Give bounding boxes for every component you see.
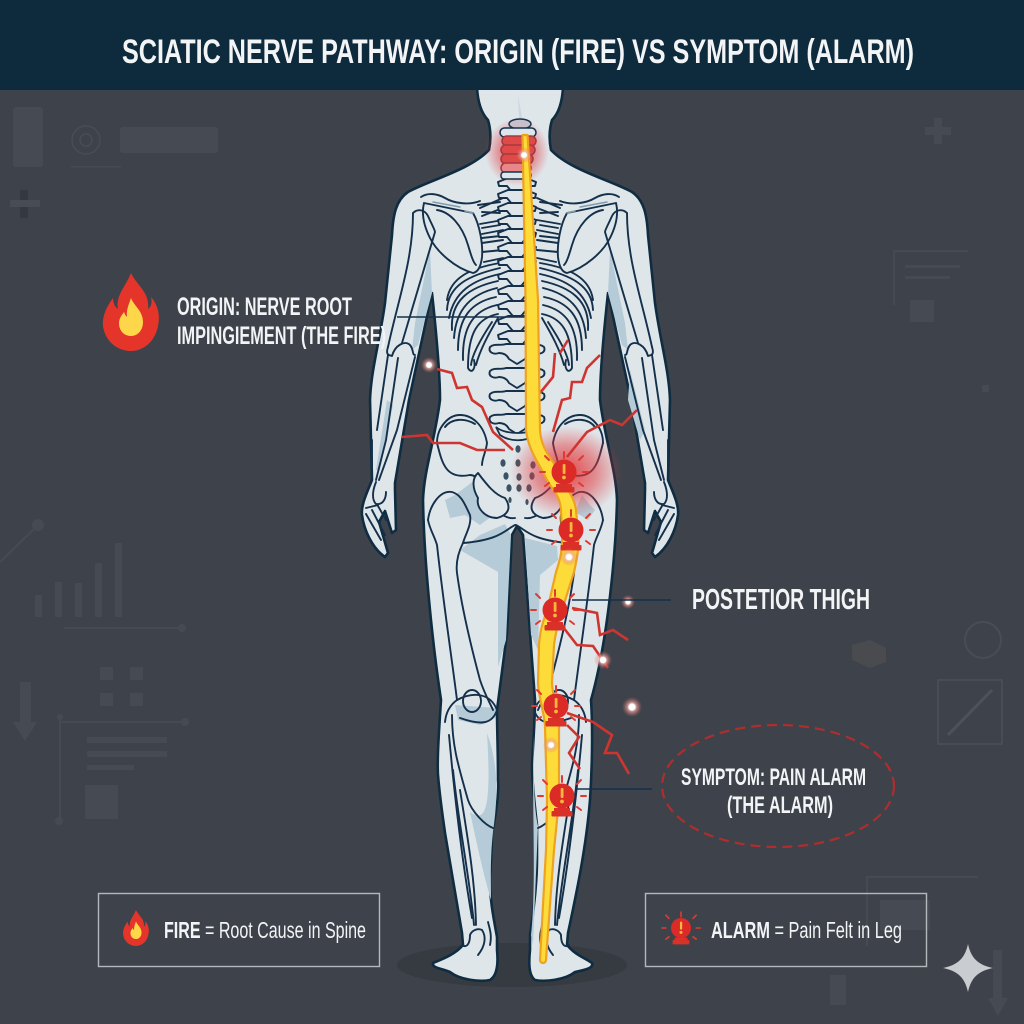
legend: fire bbox=[98, 894, 380, 966]
alarm markers along the nerve bbox=[531, 452, 595, 816]
hip pain glow bbox=[510, 426, 622, 518]
callout: symptom alarm bbox=[662, 725, 894, 847]
blue muscle shading bbox=[376, 95, 645, 945]
icon: fire bbox=[103, 273, 159, 351]
leg bones, left bbox=[428, 492, 515, 955]
label: posterior thigh: POSTETIOR THIGH bbox=[692, 584, 870, 616]
alarm: upper thigh bbox=[547, 510, 595, 550]
alarm: knee bbox=[532, 686, 580, 726]
callout: origin bbox=[103, 273, 386, 351]
origin label: IMPINGIEMENT (THE FIRE) bbox=[177, 322, 386, 350]
legend icon: fire bbox=[123, 910, 149, 946]
fire glow at cervical spine bbox=[485, 118, 549, 186]
symptom label: (THE ALARM) bbox=[727, 792, 833, 819]
sacrum foramina bbox=[500, 445, 536, 505]
sparkle mark bbox=[943, 944, 993, 992]
leader line: symptom bbox=[575, 788, 652, 790]
skeleton, left side bbox=[366, 194, 515, 540]
dashed ellipse bbox=[662, 725, 894, 847]
glow sparks bbox=[421, 147, 642, 753]
vertebral column bbox=[490, 178, 544, 440]
leader line: origin bbox=[397, 316, 527, 318]
leader line: posterior thigh bbox=[572, 599, 671, 601]
alarm: posterior thigh bbox=[531, 590, 579, 630]
alarm: calf bbox=[538, 776, 586, 816]
legend icon: alarm bbox=[662, 912, 700, 944]
alarm: gluteal bbox=[540, 452, 588, 492]
title bar bbox=[0, 0, 1024, 90]
floor shadow bbox=[397, 943, 627, 987]
legend: alarm bbox=[646, 894, 926, 966]
origin label: ORIGIN: NERVE ROOT bbox=[177, 293, 352, 321]
anatomical body figure bbox=[362, 88, 678, 981]
red pain zigzags bbox=[402, 340, 637, 774]
body silhouette bbox=[362, 88, 678, 981]
legend text: fire: FIRE = Root Cause in Spine bbox=[164, 917, 366, 943]
skeleton, right side bbox=[525, 194, 674, 540]
cervical vertebrae bbox=[500, 119, 536, 179]
legend text: alarm: ALARM = Pain Felt in Leg bbox=[711, 917, 902, 943]
symptom label: SYMPTOM: PAIN ALARM bbox=[681, 764, 866, 791]
leg bones, right bbox=[516, 492, 603, 955]
sciatic nerve pathway bbox=[522, 135, 578, 963]
